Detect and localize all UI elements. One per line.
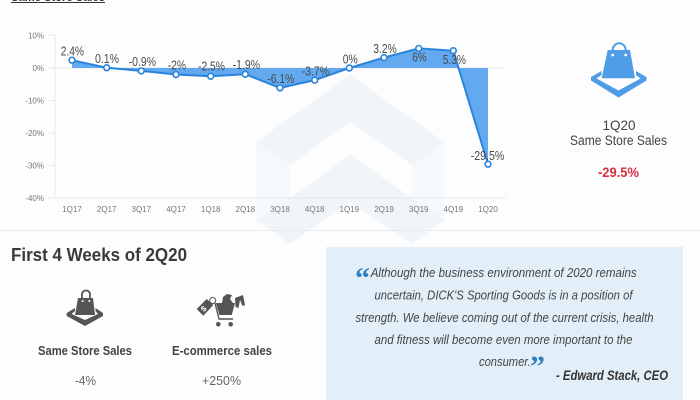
value: -4% <box>75 373 96 388</box>
data labels: 5.3% <box>443 53 466 67</box>
quote text: uncertain, DICK'S Sporting Goods is in a position of <box>374 288 634 302</box>
closing quote mark: ” <box>530 350 545 383</box>
x axis labels: 1Q20 <box>478 205 498 214</box>
x axis labels: 2Q19 <box>374 205 394 214</box>
x axis labels: 4Q18 <box>305 205 325 214</box>
x axis labels: 1Q19 <box>340 205 360 214</box>
line chart: same store sales by quarter <box>25 32 506 214</box>
x axis labels <box>62 205 498 214</box>
area fill <box>72 48 488 164</box>
x axis labels: 2Q17 <box>97 205 117 214</box>
data labels: -0.9% <box>129 55 156 69</box>
icon: shopping cart with price tag: $ <box>199 304 209 314</box>
heading: first 4 weeks: First 4 Weeks of 2Q20 <box>11 244 187 265</box>
data labels: -29.5% <box>471 149 504 163</box>
data labels: 6% <box>412 51 427 65</box>
icon: dark shopping bag <box>67 290 103 326</box>
quote text: strength. We believe coming out of the current crisis, health <box>356 310 654 325</box>
metric: e-commerce sales <box>172 294 272 388</box>
data labels: 3.2% <box>373 42 397 56</box>
value: +250% <box>202 373 241 388</box>
data labels: -2.5% <box>198 60 225 74</box>
x axis labels: 3Q18 <box>270 205 290 214</box>
data labels: 2.4% <box>61 45 84 59</box>
panel: CEO quote <box>326 247 683 400</box>
label: E-commerce sales <box>172 344 272 358</box>
quote text: consumer. <box>479 354 531 369</box>
metric: same store sales <box>38 290 132 388</box>
quote text: and fitness will become even more important to the <box>374 332 632 347</box>
label: Same Store Sales <box>38 344 132 358</box>
panel: 1Q20 summary <box>570 43 667 180</box>
data labels: 0% <box>343 52 358 66</box>
data labels: 0.1% <box>95 52 119 66</box>
y axis labels: 0% <box>32 64 44 73</box>
label: 1Q20: 1Q20 <box>602 117 636 133</box>
y axis labels: -40% <box>25 194 44 203</box>
y axis labels: -10% <box>25 96 44 106</box>
quote text: Although the business environment of 2020 remains <box>370 265 637 280</box>
x axis labels: 3Q17 <box>132 205 152 214</box>
opening quote mark: “ <box>355 262 370 295</box>
divider <box>0 230 700 231</box>
x axis labels: 4Q17 <box>166 205 186 214</box>
label: same store sales: Same Store Sales <box>570 133 667 148</box>
data labels: -6.1% <box>267 72 294 86</box>
quote attribution: - Edward Stack, CEO <box>556 367 668 383</box>
x axis labels: 1Q18 <box>201 205 221 214</box>
data markers <box>69 46 491 167</box>
data labels: -2% <box>168 59 186 73</box>
x axis labels: 3Q19 <box>409 205 429 214</box>
data labels: -3.7% <box>302 65 329 79</box>
x axis labels: 2Q18 <box>236 205 256 214</box>
background watermark logo <box>256 75 444 244</box>
y axis labels <box>25 32 44 203</box>
icon: blue shopping bag <box>591 43 646 98</box>
value: -29.5%: -29.5% <box>598 165 639 180</box>
data labels: -1.9% <box>233 58 260 72</box>
y axis and gridline <box>48 35 506 198</box>
y axis labels: -20% <box>25 129 44 138</box>
quote text <box>356 265 654 369</box>
data labels <box>61 42 504 163</box>
data line <box>72 48 488 164</box>
y axis labels: 10% <box>28 32 44 40</box>
x axis labels: 1Q17 <box>62 205 82 214</box>
x axis labels: 4Q19 <box>444 205 464 214</box>
y axis labels: -30% <box>25 162 44 170</box>
